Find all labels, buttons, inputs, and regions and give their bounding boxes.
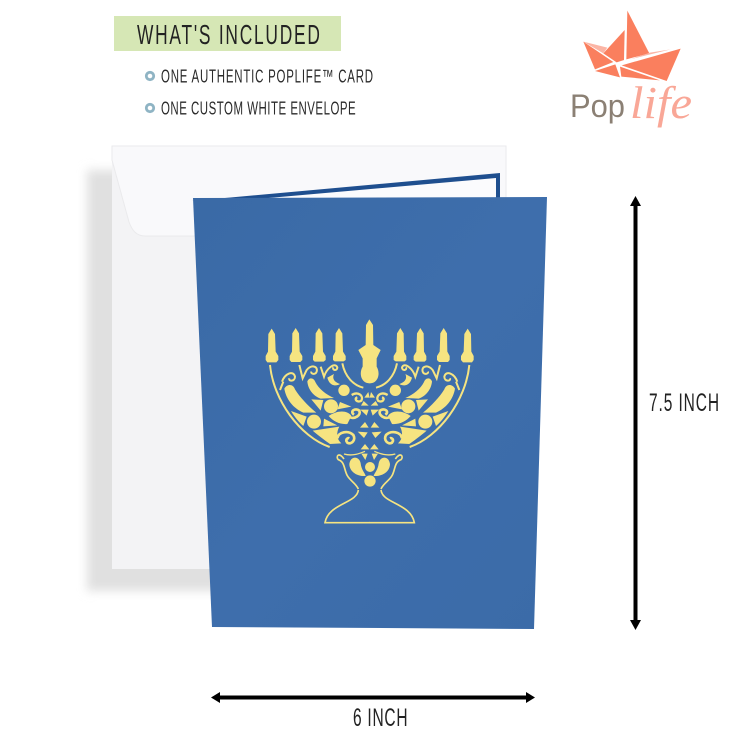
blue card front: [193, 197, 547, 629]
width label: 6 INCH: [353, 704, 408, 732]
logo wordmark life: life: [630, 77, 692, 128]
logo: [570, 11, 692, 128]
center candle: [358, 319, 381, 383]
envelope flap: [112, 146, 506, 236]
height label: 7.5 INCH: [649, 389, 719, 417]
bullet list: [146, 67, 373, 120]
bullet icon: [146, 104, 154, 112]
envelope: [87, 146, 506, 591]
menorah: [266, 319, 474, 523]
card inner white page: [257, 178, 496, 200]
logo boat icon: [583, 11, 681, 81]
width arrow: [211, 692, 535, 703]
logo wordmark Pop: Pop: [570, 88, 625, 124]
bullet text: ONE CUSTOM WHITE ENVELOPE: [161, 99, 356, 120]
envelope shadow: [87, 170, 427, 591]
heading: WHAT'S INCLUDED: [137, 19, 320, 50]
envelope body: [112, 146, 506, 569]
heading band: [114, 16, 341, 51]
bullet text: ONE AUTHENTIC POPLIFE™ CARD: [161, 67, 373, 88]
card inside back panel: [192, 173, 500, 201]
bullet icon: [146, 72, 154, 80]
foot circles: [365, 462, 375, 472]
height arrow: [630, 196, 641, 630]
